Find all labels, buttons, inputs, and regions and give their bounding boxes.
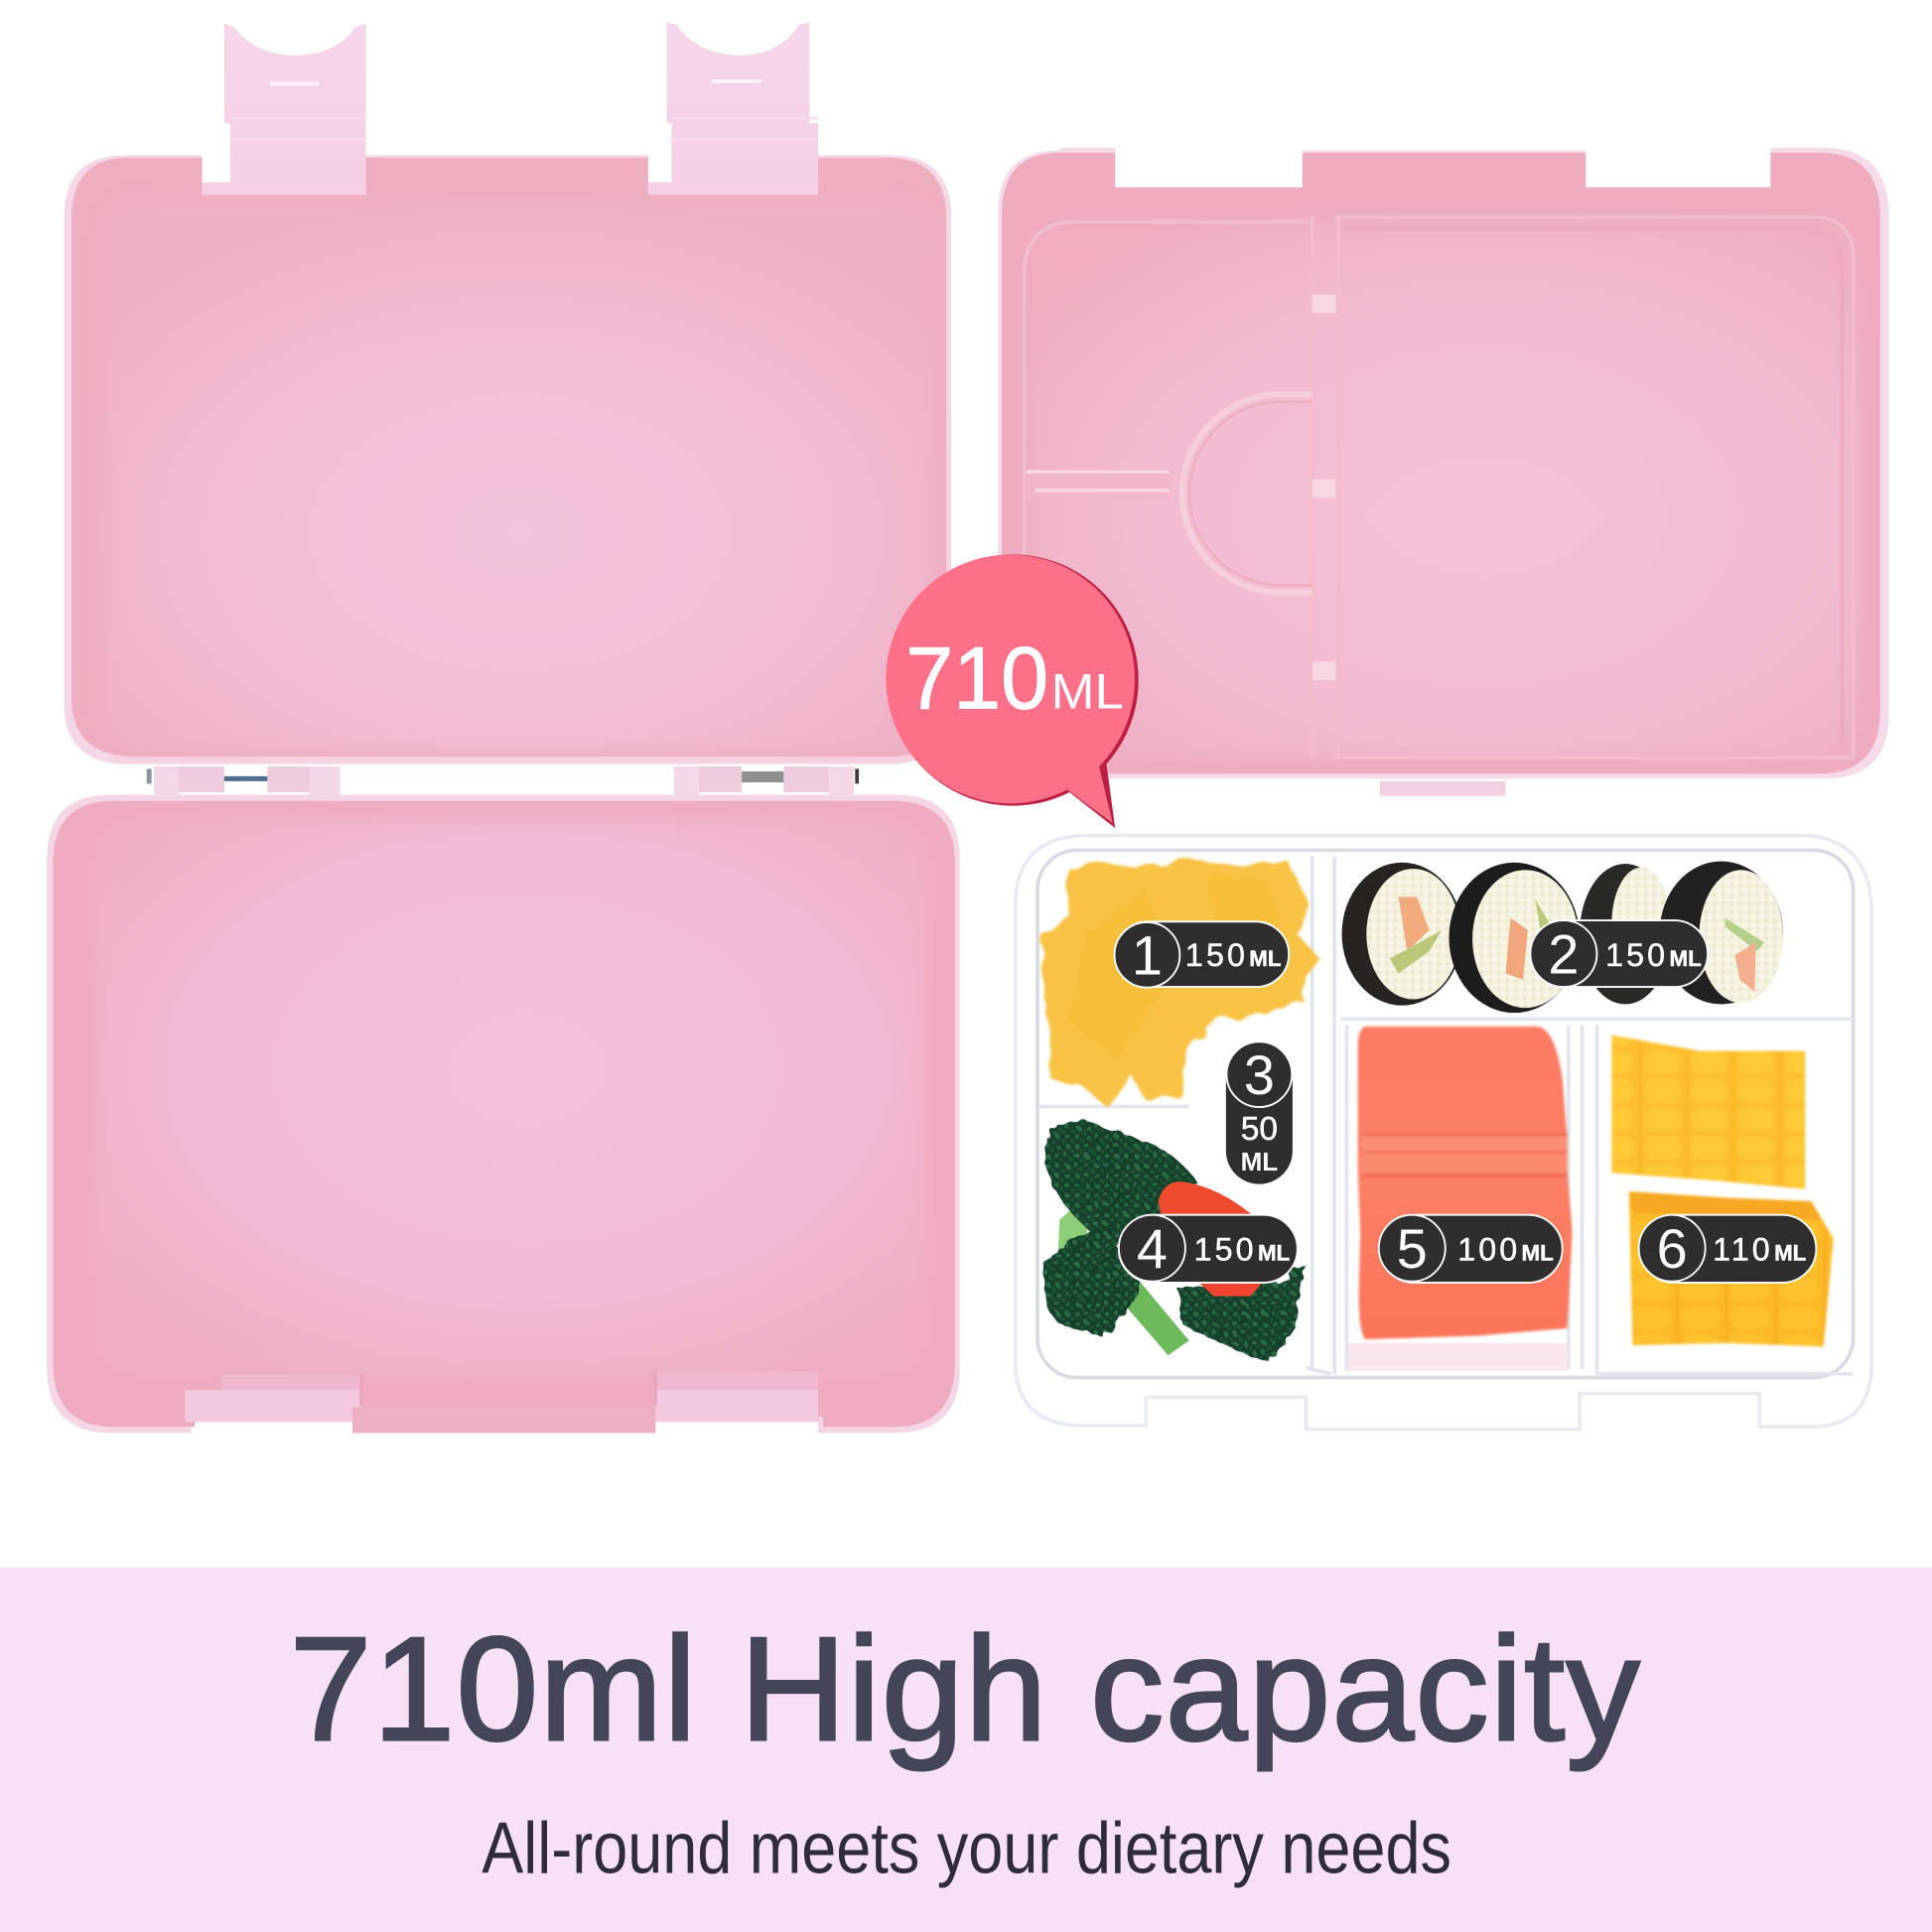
badge: compartment 6 110ML: 6 [1657,1217,1688,1280]
latch base strips [203,183,818,195]
lid top wall [71,158,946,757]
tray dividers [1038,857,1854,1374]
badge: compartment 1 150ML: 150ML [1185,937,1282,973]
panel: divider lid [998,148,1889,796]
badge: compartment 4 150ML: 4 [1137,1217,1168,1280]
compartment outlines [1024,216,1854,758]
tray body [1016,835,1871,1430]
badge: compartment 6 110ML: 110ML [1713,1232,1806,1268]
badge: compartment 1 150ML [1115,921,1289,988]
subtitle: All-round meets your dietary needs [482,1807,1451,1888]
badge: compartment 4 150ML: 150ML [1194,1232,1290,1268]
horizontal rib [1027,470,1170,499]
clip marks [1312,295,1335,680]
panel: open lid bottom half [47,794,960,1433]
lid bottom wall [53,801,955,1427]
badge: compartment 3 50ML: 50 [1241,1111,1278,1148]
badge: compartment 3 50ML: 3 [1244,1043,1275,1106]
badge: compartment 4 150ML [1119,1215,1298,1283]
divider lid surface [1002,153,1880,773]
callout: 710ML speech bubble: 710 [905,628,1048,728]
food: broccoli and pepper [1044,1121,1304,1361]
badge: compartment 3 50ML [1226,1041,1293,1184]
food: sushi roll 1 [1342,863,1462,1006]
food: sushi roll 2 [1449,863,1580,1013]
food: corn piece bottom [1629,1191,1834,1346]
food: salmon slices [1358,1027,1573,1339]
badge: compartment 6 110ML [1639,1215,1816,1283]
tray inner well [1037,850,1854,1378]
badge: compartment 2 150ML: 2 [1548,922,1579,985]
food: yellow noodles [1041,859,1323,1106]
panel: hinges [147,766,859,796]
icon: left latch tab [224,24,366,194]
divider lid floor [1033,224,1856,757]
panel: clear food tray [1016,835,1871,1430]
divider lid body [998,148,1889,778]
badge: compartment 2 150ML: 150ML [1605,937,1702,973]
callout: 710ML speech bubble [886,554,1139,828]
badge: compartment 1 150ML: 1 [1132,924,1163,987]
panel: open lid top half with latches [65,22,951,763]
badge: compartment 5 100ML [1379,1215,1563,1283]
lid bottom body [47,794,960,1433]
title: 710ml High capacity [290,1605,1640,1771]
lid top body [65,155,951,763]
lid top floor [106,205,934,752]
food: sushi roll 3 [1580,864,1671,1004]
icon: right latch tab [666,22,818,194]
lower clip [1380,781,1506,796]
food: corn piece top [1611,1035,1805,1189]
D-shaped sauce well [1182,394,1312,593]
tray light band [1348,1343,1568,1370]
callout: 710ML speech bubble: ML [1051,664,1124,720]
badge: compartment 3 50ML: ML [1241,1147,1278,1176]
badge: compartment 5 100ML: 5 [1397,1217,1428,1280]
food: sushi roll 4 [1660,862,1783,1004]
lid bottom floor [96,818,924,1375]
badge: compartment 2 150ML [1530,920,1708,987]
badge: compartment 5 100ML: 100ML [1457,1232,1554,1268]
panel: bottom banner [0,1568,1932,1932]
lower latch strips [185,1371,818,1433]
